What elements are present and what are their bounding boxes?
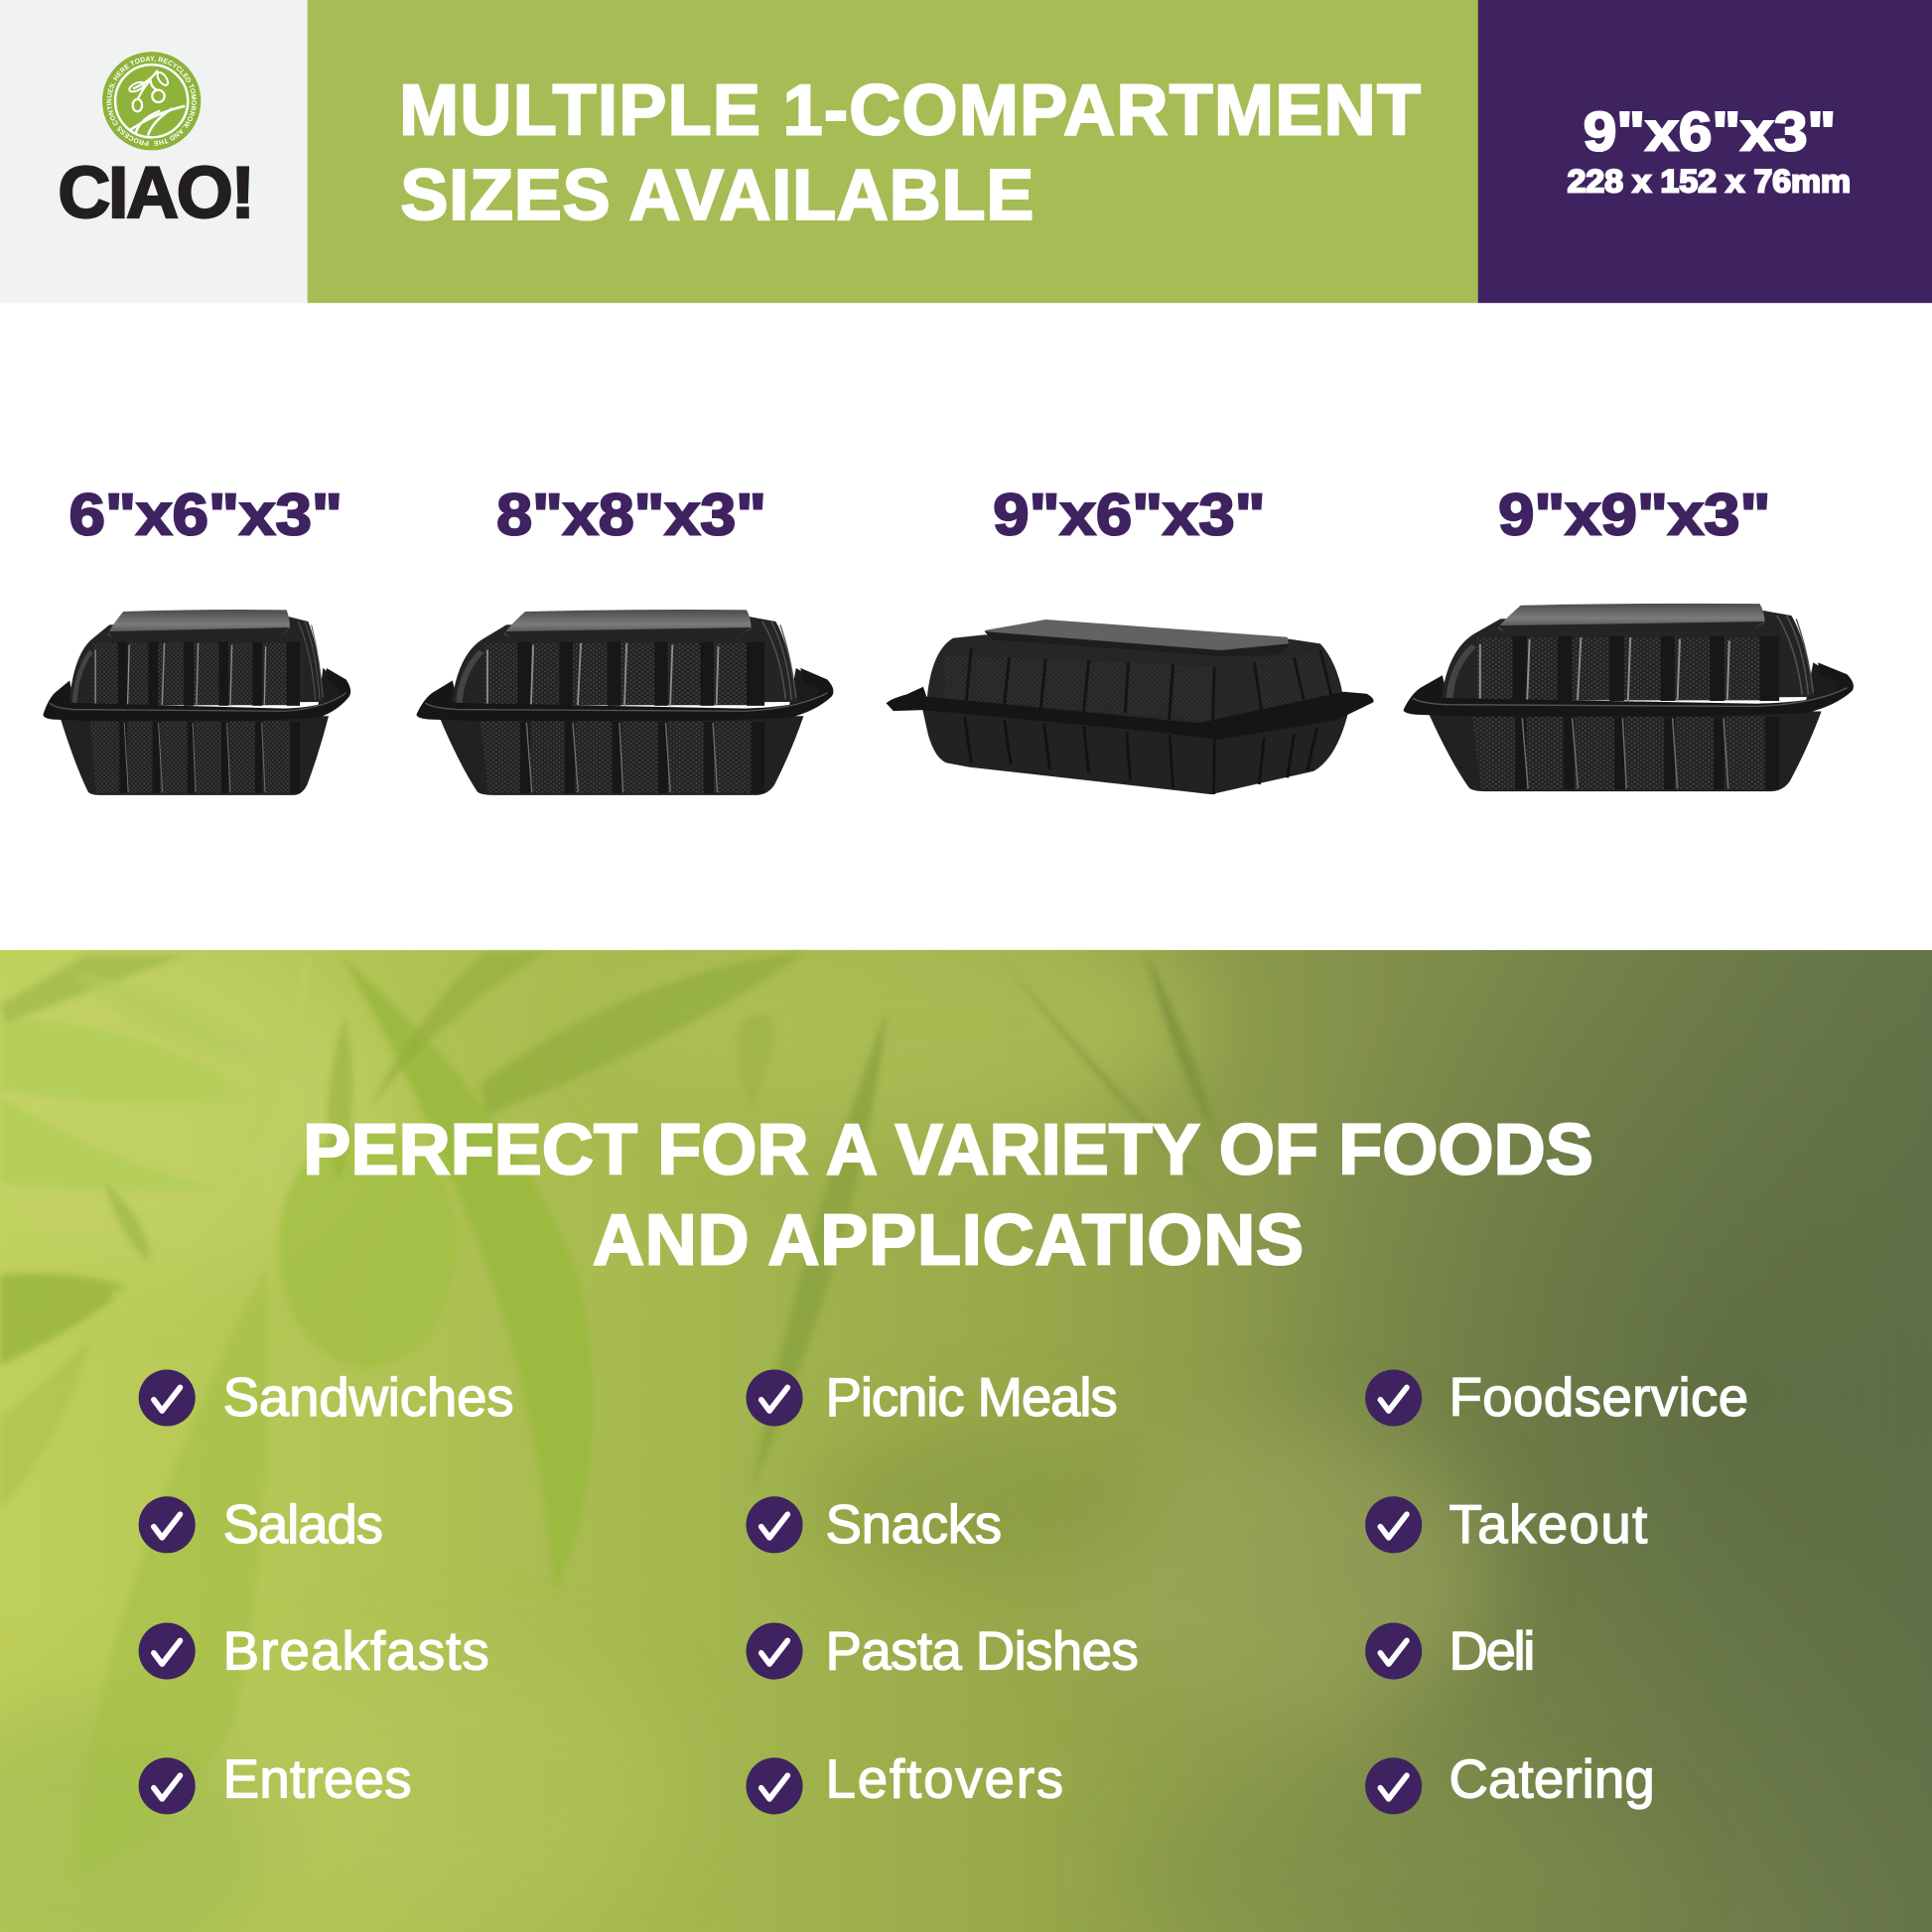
header: headline panel (308, 0, 1478, 303)
item: Salads (139, 1494, 383, 1555)
size label 8x8x3: 8"x8"x3" (496, 482, 766, 548)
headline: MULTIPLE 1-COMPARTMENT (399, 70, 1421, 150)
heading: perfect for foods: AND APPLICATIONS (593, 1200, 1304, 1280)
panel: size options (0, 303, 1932, 950)
background: olive branch leaves (0, 949, 1213, 1773)
logo wordmark: CIAO! (58, 152, 255, 233)
item: Deli: Deli (1449, 1621, 1535, 1682)
header: featured size panel (1478, 0, 1932, 303)
featured size text: 9"x6"x3" (1584, 99, 1836, 162)
item: Catering: Catering (1449, 1749, 1655, 1810)
panel: foods and applications background (0, 911, 1932, 1932)
item: Leftovers (746, 1749, 1063, 1814)
item: Entrees: Entrees (223, 1749, 412, 1810)
size label 9x9x3: 9"x9"x3" (1498, 482, 1770, 548)
header: logo panel (0, 0, 308, 303)
item: Snacks (746, 1494, 1002, 1555)
item: Leftovers: Leftovers (826, 1749, 1063, 1810)
container 8x8x3 (417, 610, 833, 795)
item: Sandwiches: Sandwiches (223, 1367, 514, 1428)
list column 2 (746, 1367, 1139, 1814)
icon: circular olive seal: PROCESS CONTINUES. HERE TODAY, RECYCLED TOMORROW. AND THE (106, 56, 197, 146)
header: headline panel: SIZES AVAILABLE (400, 156, 1034, 235)
item: Entrees (139, 1749, 412, 1814)
item: Breakfasts: Breakfasts (223, 1621, 489, 1682)
container 9x6x3 (887, 620, 1374, 794)
item: Picnic Meals: Picnic Meals (826, 1367, 1118, 1428)
list column 1 (139, 1367, 514, 1814)
item: Pasta Dishes: Pasta Dishes (826, 1621, 1139, 1682)
list column 3 (1365, 1367, 1748, 1814)
size label 6x6x3: 6"x6"x3" (69, 482, 343, 548)
item: Takeout: Takeout (1449, 1494, 1647, 1555)
item: Catering (1365, 1749, 1655, 1814)
container 6x6x3 (43, 610, 350, 795)
container 9x9x3 (1404, 604, 1854, 791)
item: Foodservice: Foodservice (1449, 1367, 1748, 1428)
item: Salads: Salads (223, 1494, 383, 1555)
item: Deli (1365, 1621, 1535, 1682)
heading: perfect for foods: PERFECT FOR A VARIETY OF FOODS (303, 1111, 1593, 1190)
header: featured size panel: 228 x 152 x 76mm (1568, 164, 1851, 200)
size label 9x6x3: 9"x6"x3" (993, 482, 1266, 548)
heading: perfect for foods (303, 1111, 1593, 1280)
item: Snacks: Snacks (826, 1494, 1002, 1555)
